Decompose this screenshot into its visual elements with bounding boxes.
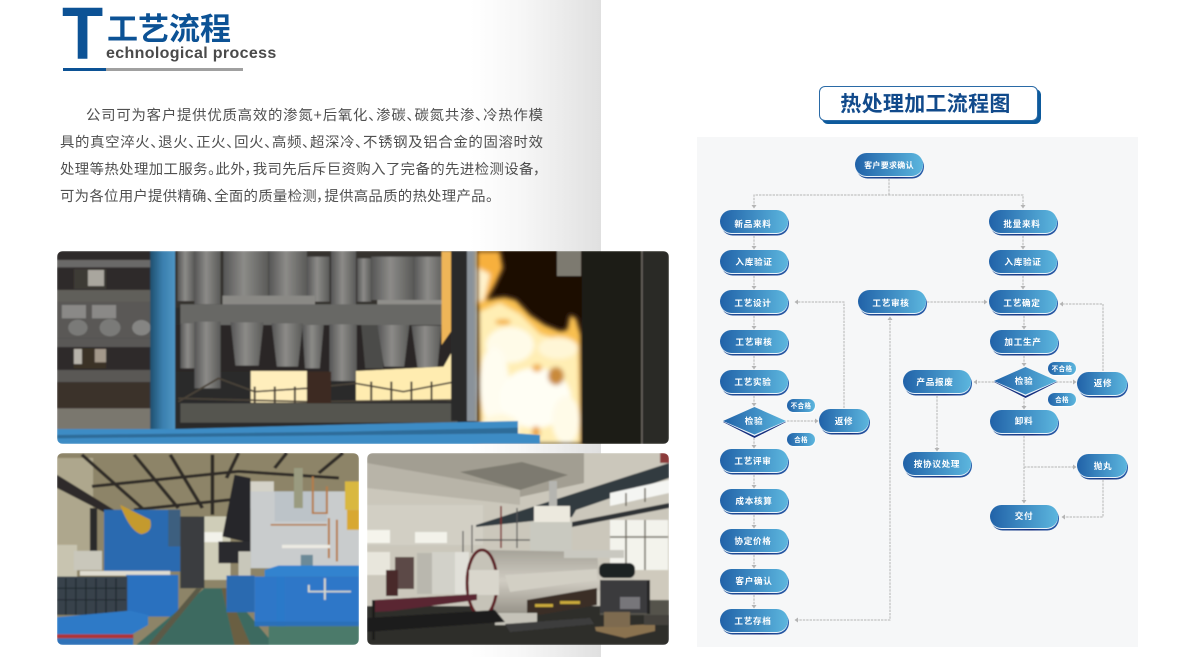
step: 批量来料 <box>989 210 1058 236</box>
badge: 合格: 合格 <box>794 435 808 444</box>
step: 工艺审核 <box>720 330 789 356</box>
intro text block: 具的真空淬火、退火、正火、回火、高频、超深冷、不锈钢及铝合金的固溶时效 <box>60 135 543 151</box>
heading Chinese title: 工艺流程 <box>107 12 231 47</box>
flow chart title: 热处理加工流程图 <box>840 93 1011 116</box>
step: 工艺设计 <box>720 290 789 316</box>
decision: 检验 right <box>994 367 1057 398</box>
step: 工艺实验: 工艺实验 <box>734 376 772 387</box>
step: 按协议处理: 按协议处理 <box>914 458 960 469</box>
step: 返修: 返修 <box>835 415 853 426</box>
step: 工艺设计: 工艺设计 <box>734 297 772 308</box>
step: 批量来料: 批量来料 <box>1003 218 1041 229</box>
section heading <box>62 0 277 75</box>
step: 按协议处理 <box>903 452 972 478</box>
step: 客户确认 <box>720 569 789 594</box>
step: 新品来料 <box>720 210 789 236</box>
decision: 检验 <box>723 407 786 438</box>
step: 工艺确定 <box>989 290 1058 316</box>
step: 产品报废: 产品报废 <box>916 376 954 387</box>
step: 卸料 <box>990 410 1059 436</box>
photo: furnace with flames <box>57 251 669 444</box>
badge: 合格 right <box>1048 393 1077 407</box>
step: 入库验证 right: 入库验证 <box>1004 256 1042 267</box>
step: 工艺实验 <box>720 370 789 396</box>
photo: workshop with blue furnaces <box>57 453 359 645</box>
step: 产品报废 <box>903 370 972 396</box>
flow chart title box <box>819 86 1041 124</box>
step: 客户要求确认 <box>855 153 924 178</box>
badge: 不合格: 不合格 <box>791 401 811 410</box>
step: 工艺评审 <box>720 449 789 474</box>
step: 协定价格: 协定价格 <box>734 535 772 546</box>
step: 抛丸: 抛丸 <box>1094 460 1112 471</box>
intro text block <box>60 108 543 205</box>
step: 卸料: 卸料 <box>1015 415 1033 426</box>
left page gradient background <box>0 0 601 657</box>
badge: 不合格 <box>787 399 816 413</box>
photo: vacuum furnaces <box>367 453 669 645</box>
decision: 检验 right: 检验 <box>1015 375 1033 386</box>
panel: flow chart <box>697 137 1138 647</box>
intro text block: 公司可为客户提供优质高效的渗氮+后氧化、渗碳、碳氮共渗、冷热作模 <box>86 108 543 124</box>
step: 工艺审核 center <box>858 290 927 316</box>
heading underline <box>63 68 243 71</box>
step: 成本核算: 成本核算 <box>735 495 773 506</box>
step: 工艺评审: 工艺评审 <box>734 455 772 466</box>
connector arrows <box>752 179 1103 622</box>
badge: 合格 <box>787 433 816 447</box>
step: 抛丸 <box>1077 454 1128 480</box>
step: 工艺确定: 工艺确定 <box>1003 297 1041 308</box>
step: 返修 right: 返修 <box>1094 377 1112 388</box>
badge: 不合格 right: 不合格 <box>1052 364 1072 373</box>
step: 返修 right <box>1077 372 1128 398</box>
step: 客户要求确认: 客户要求确认 <box>864 160 914 170</box>
step: 协定价格 <box>720 529 789 554</box>
step: 工艺存档 <box>720 609 789 634</box>
step: 工艺审核 center: 工艺审核 <box>872 297 910 308</box>
step: 返修 <box>819 409 870 434</box>
step: 交付 <box>990 505 1059 530</box>
step: 成本核算 <box>720 489 789 514</box>
step: 入库验证: 入库验证 <box>735 256 773 267</box>
step: 加工生产: 加工生产 <box>1004 336 1042 347</box>
step: 加工生产 <box>990 330 1059 356</box>
badge: 不合格 right <box>1048 362 1077 376</box>
step: 工艺审核: 工艺审核 <box>735 336 773 347</box>
step: 新品来料: 新品来料 <box>734 218 772 229</box>
decision: 检验: 检验 <box>745 415 763 426</box>
intro text block: 处理等热处理加工服务。此外，我司先后斥巨资购入了完备的先进检测设备， <box>60 162 541 178</box>
intro text block: 可为各位用户提供精确、全面的质量检测，提供高品质的热处理产品。 <box>60 189 493 205</box>
step: 入库验证 right <box>989 250 1058 276</box>
badge: 合格 right: 合格 <box>1055 395 1069 404</box>
step: 入库验证 <box>720 250 789 276</box>
step: 交付: 交付 <box>1015 510 1033 521</box>
step: 客户确认: 客户确认 <box>735 575 773 586</box>
heading English subtitle: echnological process <box>106 45 277 62</box>
step: 工艺存档: 工艺存档 <box>734 615 772 626</box>
